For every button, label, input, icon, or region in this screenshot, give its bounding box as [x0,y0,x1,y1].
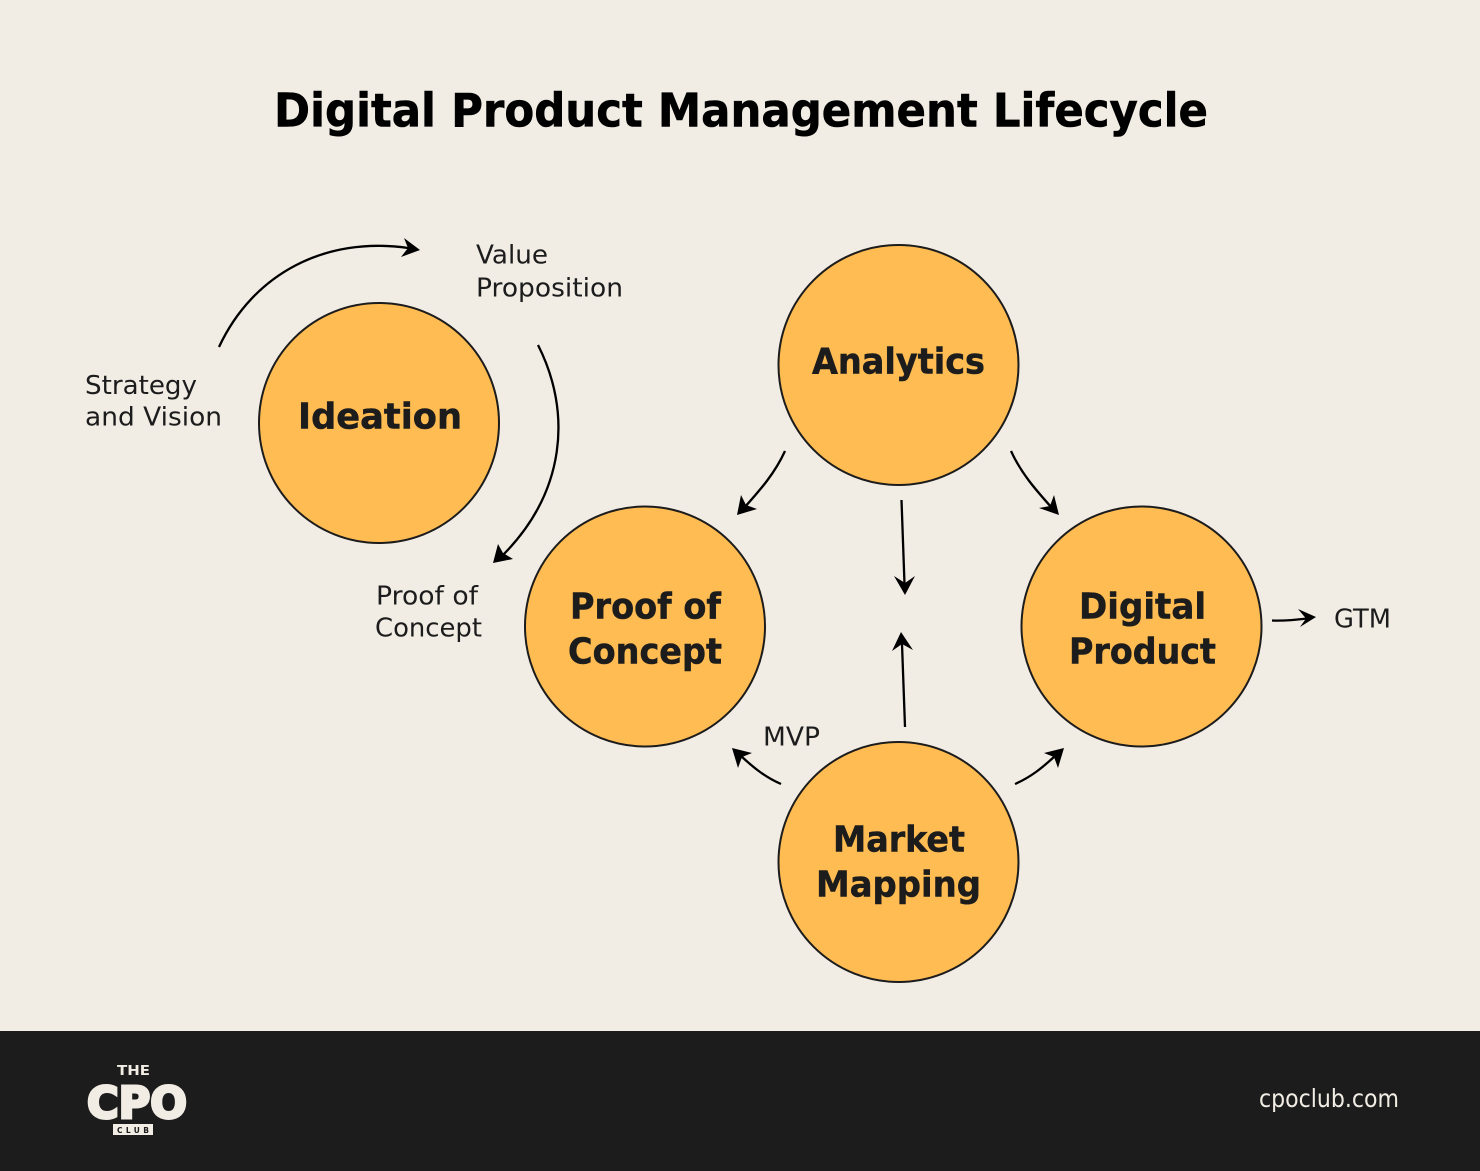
title: Digital Product Management Lifecycle [274,84,1208,138]
label: Proof of Concept [375,582,482,644]
label: Proof of Concept: Proof of [376,582,479,612]
node: Analytics [778,245,1018,485]
logo: The CPO Club: CLUB [117,1126,149,1135]
arrow: digital product to GTM [1272,609,1316,627]
footer url: cpoclub.com [1259,1084,1399,1113]
label: MVP: MVP [763,722,820,752]
label: Value Proposition: Value [476,240,548,270]
node: Digital Product: Product [1069,632,1216,672]
logo: The CPO Club [87,1063,187,1135]
logo: The CPO Club: CPO [87,1078,187,1129]
label: Strategy and Vision: Strategy [85,371,197,401]
node: Digital Product [1022,506,1262,746]
arrow: market mapping to digital product [1015,748,1064,784]
node: Proof of Concept: Concept [568,632,722,672]
logo: The CPO Club: THE [117,1063,150,1079]
arrow: strategy to value proposition [219,238,420,347]
node: Digital Product: Digital [1079,586,1206,628]
node: Market Mapping: Market [833,820,965,860]
label: Strategy and Vision [85,371,222,432]
footer bar [0,1031,1480,1171]
node: Market Mapping [778,742,1018,982]
arrow: value proposition to proof of concept [493,345,558,563]
label: Strategy and Vision: and Vision [85,402,222,432]
arrow: analytics to digital product [1011,451,1059,515]
node: Ideation: Ideation [298,396,462,438]
node: Proof of Concept [525,506,765,746]
arrow: market mapping to proof of concept [732,748,781,784]
label: GTM: GTM [1334,604,1391,634]
arrow: analytics to proof of concept [737,451,785,515]
node: Proof of Concept: Proof of [570,586,722,628]
node: Ideation [259,303,499,543]
label: Value Proposition: Proposition [476,274,623,304]
node: Analytics: Analytics [812,342,985,382]
arrow: market mapping to center [892,632,913,727]
label: Proof of Concept: Concept [375,614,482,644]
arrow: analytics to center [894,500,915,595]
label: Value Proposition [476,240,623,304]
node: Market Mapping: Mapping [816,864,981,906]
